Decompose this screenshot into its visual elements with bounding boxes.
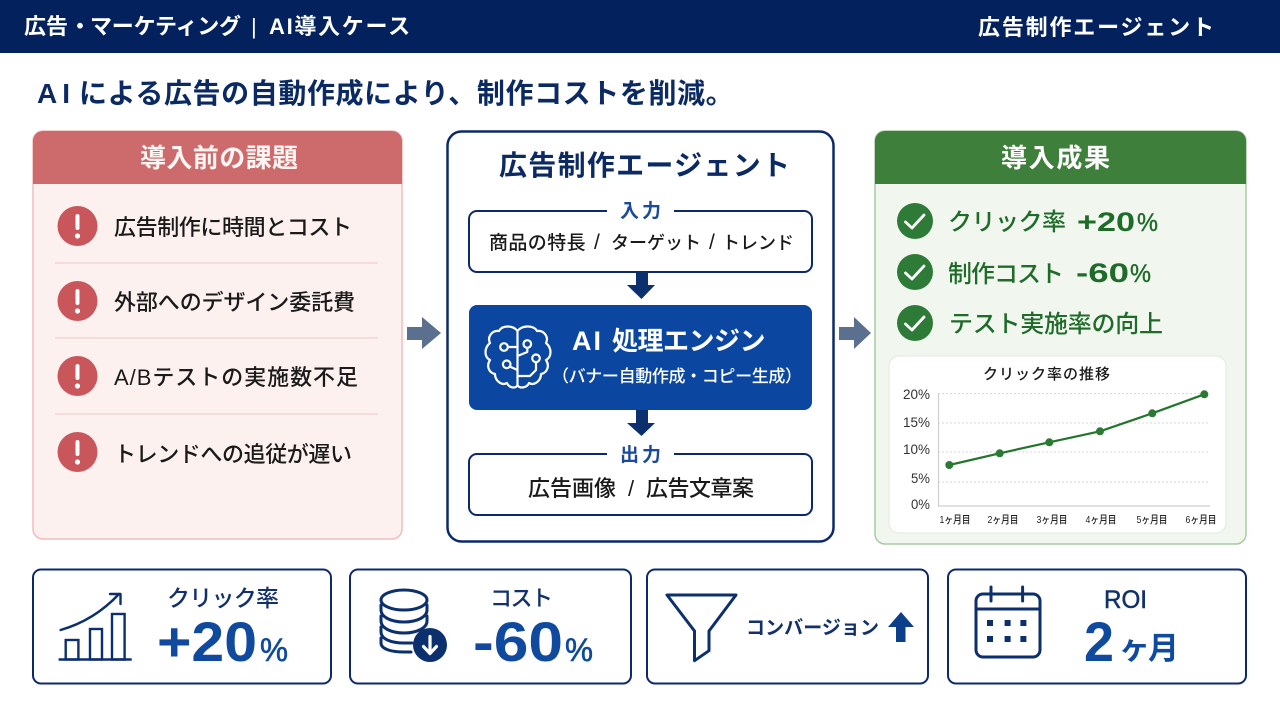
input box: トレンド: [722, 233, 794, 253]
KPI value: 2: [1084, 610, 1114, 673]
header category label: |: [251, 14, 257, 39]
header agent name: 広告制作エージェント: [978, 15, 1214, 40]
header category label: ・: [69, 14, 91, 39]
icon: rising bar chart: [59, 594, 132, 660]
KPI card: conversion: [647, 570, 928, 684]
arrow: agent to results: [839, 317, 871, 349]
issue 2: [58, 281, 355, 321]
y axis labels: 0%: [911, 496, 930, 512]
issue 3: [58, 356, 358, 396]
line chart: click-through rate trend: [889, 356, 1226, 533]
issue 4: [58, 432, 352, 472]
engine title: 処理エンジン: [612, 326, 765, 356]
y axis labels: [903, 386, 930, 512]
output box: 広告画像: [528, 476, 616, 501]
result 3: [897, 305, 1163, 341]
input box: /: [594, 231, 600, 254]
issue 2: 外部へのデザイン委託費: [114, 290, 355, 315]
header bar: [0, 0, 1280, 53]
KPI card: click rate: [33, 570, 331, 684]
panel heading: issues: 導入前の課題: [140, 143, 298, 173]
result 2: 制作コスト: [948, 261, 1064, 288]
result 1: %: [1137, 209, 1158, 237]
result 3: テスト実施率の向上: [949, 311, 1163, 338]
KPI value: %: [260, 632, 288, 668]
KPI label: コスト: [490, 586, 553, 611]
KPI value: [1084, 610, 1179, 673]
output box: [469, 444, 812, 515]
result 2: [897, 254, 1151, 290]
KPI card: ROI: [948, 570, 1246, 684]
header category label: AI導入ケース: [269, 14, 412, 39]
issue 1: 広告制作に時間とコスト: [114, 215, 352, 240]
x axis labels: [940, 514, 1216, 526]
input box: 商品の特長: [489, 232, 586, 254]
x axis labels: 4ヶ月目: [1086, 514, 1116, 526]
issue 3: A/Bテストの実施数不足: [114, 365, 358, 390]
panel: ad production agent: [448, 132, 834, 542]
y axis labels: 5%: [911, 470, 930, 486]
x axis labels: 3ヶ月目: [1036, 514, 1068, 526]
result 1: +20: [1077, 207, 1135, 237]
output box: 出力: [620, 444, 661, 466]
main heading: による広告の自動作成により、制作コストを削減。: [79, 78, 734, 109]
engine title: AI: [572, 326, 603, 356]
KPI value: [473, 610, 593, 673]
arrow: engine to output: [627, 410, 655, 436]
result 1: [897, 203, 1158, 239]
arrow: issues to agent: [407, 317, 441, 349]
icon: calendar: [976, 587, 1040, 657]
KPI label: クリック率: [167, 585, 279, 611]
KPI label: ROI: [1104, 586, 1147, 614]
panel heading: agent: 広告制作エージェント: [499, 150, 790, 181]
main heading: AI: [37, 78, 75, 109]
panel heading: results: 導入成果: [1001, 143, 1110, 173]
icon: coin stack with down arrow: [381, 590, 447, 662]
KPI value: %: [565, 632, 593, 668]
output box: /: [628, 476, 635, 501]
y axis labels: 15%: [903, 414, 930, 430]
engine subtitle: （バナー自動作成・コピー生成）: [552, 367, 802, 386]
input box: /: [709, 231, 715, 254]
output box: 広告文章案: [646, 476, 754, 501]
KPI value: ヶ月: [1119, 631, 1179, 666]
KPI value: -60: [473, 610, 563, 673]
x axis labels: 1ヶ月目: [940, 514, 970, 526]
data line: [945, 390, 1208, 469]
icon: up arrow: [888, 612, 914, 642]
result 2: -60: [1076, 258, 1129, 288]
KPI card: cost: [350, 570, 631, 684]
x axis labels: 5ヶ月目: [1136, 514, 1168, 526]
y axis labels: 10%: [903, 441, 930, 457]
result 1: クリック率: [948, 209, 1066, 236]
x axis labels: 2ヶ月目: [988, 514, 1018, 526]
header category label: マーケティング: [90, 14, 241, 39]
result 2: %: [1130, 260, 1151, 288]
y axis labels: 20%: [903, 386, 930, 402]
input box: 入力: [620, 200, 661, 222]
issue 4: トレンドへの追従が遅い: [114, 442, 352, 467]
issue 1: [58, 206, 352, 246]
AI engine box: [469, 305, 812, 410]
x axis labels: 6ヶ月目: [1186, 514, 1216, 526]
input box: [469, 200, 812, 272]
chart title: クリック率の推移: [983, 366, 1110, 383]
panel: results: [875, 131, 1246, 544]
KPI label: コンバージョン: [746, 617, 879, 639]
icon: funnel: [667, 595, 736, 661]
header category label: 広告: [24, 14, 68, 39]
input box: ターゲット: [611, 233, 701, 253]
icon: brain: [486, 326, 550, 387]
KPI value: +20: [157, 610, 257, 673]
panel: before-adoption issues: [33, 131, 402, 539]
arrow: input to engine: [627, 272, 655, 299]
